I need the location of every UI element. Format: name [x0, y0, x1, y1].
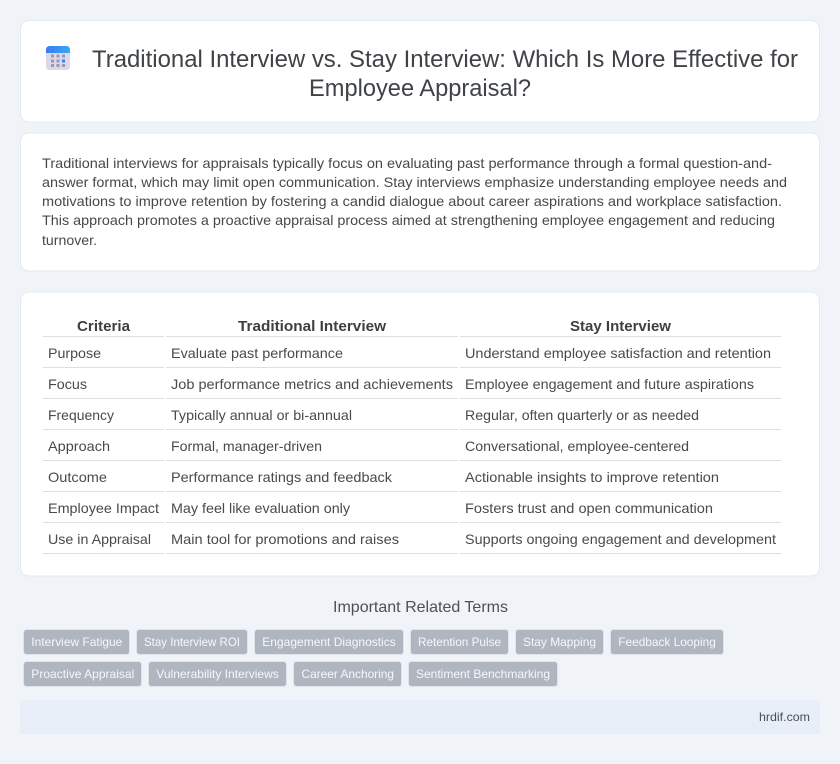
- row: outcome: Performance ratings and feedback: [171, 469, 393, 485]
- row: focus: Employee engagement and future aspirations: [465, 376, 754, 392]
- tag: Proactive Appraisal: [24, 662, 142, 686]
- tag: Career Anchoring: [294, 662, 402, 686]
- tag: Retention Pulse: Retention Pulse: [418, 635, 501, 649]
- row: focus: Focus: [48, 376, 87, 392]
- row: use in appraisal: Supports ongoing engagement and development: [465, 531, 776, 547]
- panel: title: [20, 20, 820, 122]
- tag: Vulnerability Interviews: [148, 662, 286, 686]
- row: purpose: Evaluate past performance: [171, 345, 343, 361]
- title text: [92, 46, 798, 102]
- panel: introduction: [20, 133, 820, 271]
- tag: Stay Mapping: Stay Mapping: [523, 635, 596, 649]
- intro paragraph: turnover.: [42, 232, 97, 248]
- table header: Traditional Interview: [238, 318, 386, 335]
- tag: Stay Mapping: [516, 630, 604, 654]
- row: approach: Conversational, employee-centered: [465, 438, 689, 454]
- row: employee impact: Employee Impact: [48, 500, 159, 516]
- row: purpose: Purpose: [48, 345, 101, 361]
- panel: comparison table: [20, 292, 820, 576]
- tag: Proactive Appraisal: Proactive Appraisal: [31, 667, 134, 681]
- tag: Vulnerability Interviews: Vulnerability Interviews: [156, 667, 279, 681]
- row: employee impact: Fosters trust and open communication: [465, 500, 713, 516]
- row: use in appraisal: Use in Appraisal: [48, 531, 151, 547]
- row: approach: Formal, manager-driven: [171, 438, 322, 454]
- tag: Feedback Looping: Feedback Looping: [618, 635, 716, 649]
- row: outcome: [48, 469, 719, 485]
- heading: important related terms: Important Related Terms: [333, 599, 508, 616]
- intro paragraph: [42, 155, 787, 248]
- row: focus: [48, 376, 754, 392]
- row: frequency: Typically annual or bi-annual: [171, 407, 352, 423]
- row: use in appraisal: [48, 531, 776, 547]
- row: outcome: Actionable insights to improve retention: [465, 469, 719, 485]
- tag: Career Anchoring: Career Anchoring: [302, 667, 394, 681]
- row: outcome: Outcome: [48, 469, 107, 485]
- footer source text: hrdif.com: [759, 710, 810, 724]
- row: frequency: Regular, often quarterly or as needed: [465, 407, 699, 423]
- tag: Sentiment Benchmarking: [408, 662, 558, 686]
- tag: Stay Interview ROI: [136, 630, 248, 654]
- tag: Sentiment Benchmarking: Sentiment Benchmarking: [416, 667, 550, 681]
- tag: Interview Fatigue: [24, 630, 130, 654]
- tag: Engagement Diagnostics: [254, 630, 404, 654]
- tag: Interview Fatigue: Interview Fatigue: [31, 635, 123, 649]
- row: employee impact: [48, 500, 713, 516]
- row: use in appraisal: Main tool for promotions and raises: [171, 531, 399, 547]
- row: employee impact: May feel like evaluation only: [171, 500, 350, 516]
- intro paragraph: Traditional interviews for appraisals typically focus on evaluating past performance through a formal question-and-: [42, 155, 772, 171]
- row: purpose: [48, 345, 771, 361]
- row: purpose: Understand employee satisfaction and retention: [465, 345, 771, 361]
- tag: Retention Pulse: [410, 630, 508, 654]
- row: frequency: [48, 407, 699, 423]
- title text: Traditional Interview vs. Stay Interview: Which Is More Effective for: [92, 46, 798, 73]
- title text: Employee Appraisal?: [309, 75, 531, 102]
- tag: Feedback Looping: [610, 630, 724, 654]
- tag: Engagement Diagnostics: Engagement Diagnostics: [262, 635, 396, 649]
- row: focus: Job performance metrics and achievements: [171, 376, 453, 392]
- row: frequency: Frequency: [48, 407, 114, 423]
- table header: Stay Interview: [570, 318, 671, 335]
- tag: Stay Interview ROI: Stay Interview ROI: [144, 635, 240, 649]
- footer: [20, 700, 820, 734]
- row: approach: Approach: [48, 438, 110, 454]
- row: approach: [48, 438, 689, 454]
- icon: calendar: [46, 46, 70, 70]
- intro paragraph: This approach promotes a proactive appraisal process aimed at strengthening employee engagement and reducing: [42, 212, 775, 228]
- tag list: [24, 630, 724, 686]
- table header: Criteria: [77, 318, 131, 335]
- intro paragraph: motivations to improve retention by fostering a candid dialogue about career aspirations and workplace satisfaction.: [42, 193, 782, 209]
- intro paragraph: answer format, which may limit open communication. Stay interviews emphasize understanding employee needs and: [42, 174, 787, 190]
- table header: [77, 318, 671, 335]
